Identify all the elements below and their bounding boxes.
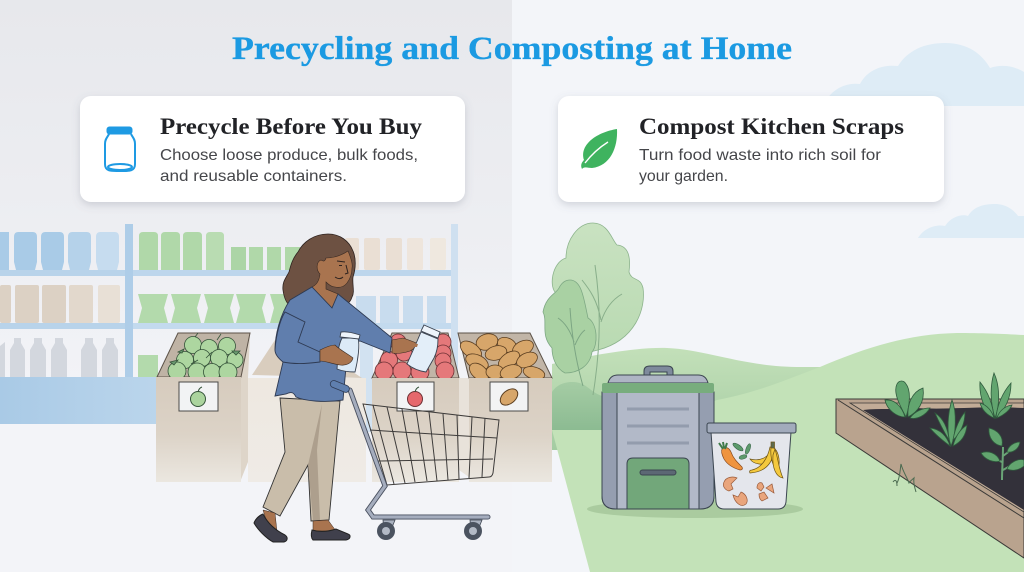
hand holding jar xyxy=(320,345,353,365)
small tree xyxy=(543,280,596,386)
blue column behind bins xyxy=(360,329,373,432)
sleeve xyxy=(275,312,320,364)
heading: Compost Kitchen Scraps xyxy=(639,114,904,139)
vent lines xyxy=(627,409,689,443)
rim edge xyxy=(838,400,1024,518)
trees xyxy=(543,223,643,395)
pail body xyxy=(711,432,791,509)
bin handle xyxy=(644,366,673,376)
plant one xyxy=(885,381,930,418)
apple bin label xyxy=(179,382,218,411)
title: Precycling and Composting at Home xyxy=(232,31,792,67)
grass tuft xyxy=(893,464,916,492)
soil xyxy=(863,407,1024,510)
apple leaves xyxy=(170,333,240,365)
cart front wheel xyxy=(377,520,395,540)
shelf bottom row: grey bottles xyxy=(0,338,118,377)
hand reaching xyxy=(392,338,419,353)
face and neck xyxy=(312,251,352,308)
compost shadow xyxy=(587,500,803,518)
clouds xyxy=(823,43,1024,238)
kitchen scrap pail xyxy=(707,423,796,509)
produce bins xyxy=(156,331,552,482)
card: compost kitchen scraps xyxy=(558,96,944,202)
pants xyxy=(263,398,340,521)
description: Choose loose produce, bulk foods, xyxy=(160,147,418,164)
shelf boards and posts xyxy=(0,224,458,378)
card: precycle before you buy xyxy=(80,96,465,202)
hair xyxy=(283,234,355,307)
right shoe xyxy=(311,529,350,540)
shelf top row: beige jars xyxy=(345,238,446,270)
shelf middle row: blue containers xyxy=(356,296,446,323)
foreground lawn xyxy=(552,333,1024,572)
bin front xyxy=(156,377,241,482)
cart handle grip xyxy=(329,379,350,393)
cart basket xyxy=(363,404,499,485)
description: your garden. xyxy=(639,168,728,185)
large tree xyxy=(552,223,643,395)
carrot xyxy=(719,442,742,470)
blue base cabinet xyxy=(0,377,170,424)
green apples xyxy=(168,336,243,381)
red apples xyxy=(375,334,454,381)
shelf top row: green bottles and boxes xyxy=(139,232,300,270)
bin body xyxy=(602,392,714,509)
green band xyxy=(602,383,714,393)
shelf bottom row: green box xyxy=(138,355,158,377)
shelf middle row: tan jars xyxy=(0,285,120,323)
left shoe xyxy=(254,514,287,542)
bin lid xyxy=(608,375,708,383)
glass jar in arm xyxy=(337,332,360,372)
bin front xyxy=(469,378,552,482)
green door xyxy=(627,458,689,509)
heading: Precycle Before You Buy xyxy=(160,114,423,139)
potatoes xyxy=(457,331,546,384)
potato bin xyxy=(457,331,552,482)
shelf middle row: green packages xyxy=(138,294,292,323)
garden hills xyxy=(552,333,1024,572)
apple bin xyxy=(156,333,250,482)
ankles xyxy=(263,510,336,532)
hedge xyxy=(552,382,640,430)
shopping cart xyxy=(350,390,499,540)
red apple label xyxy=(397,382,434,411)
banana peel xyxy=(750,442,783,478)
plant four xyxy=(981,428,1024,480)
face details xyxy=(335,261,348,278)
bed wood frame xyxy=(836,399,1024,558)
green peelings xyxy=(732,442,752,460)
potato label xyxy=(490,382,528,411)
inner rim xyxy=(850,403,1024,512)
plant three xyxy=(980,373,1012,418)
red apple bin xyxy=(372,333,459,482)
cart frame xyxy=(350,390,488,517)
description xyxy=(160,147,418,185)
description: and reusable containers. xyxy=(160,168,347,185)
door slot xyxy=(640,470,676,475)
plant two xyxy=(930,400,967,446)
compost bin xyxy=(602,366,714,509)
bin front xyxy=(372,378,459,482)
woman shopper xyxy=(254,234,440,542)
cart rear wheel xyxy=(464,520,482,540)
pail lid xyxy=(707,423,796,433)
back hill xyxy=(552,348,830,450)
raised garden bed xyxy=(836,373,1024,558)
store shelves xyxy=(0,224,458,432)
shelf top row: blue bottles xyxy=(0,232,119,270)
eggshells xyxy=(723,477,774,505)
description: Turn food waste into rich soil for xyxy=(639,147,882,164)
finger over jar xyxy=(403,342,418,347)
description xyxy=(639,147,882,185)
icon: jar xyxy=(105,128,135,171)
faded centre bin xyxy=(248,337,366,482)
icon: leaf xyxy=(581,129,617,169)
glass jar in hand xyxy=(407,325,440,372)
sweater xyxy=(275,287,392,401)
